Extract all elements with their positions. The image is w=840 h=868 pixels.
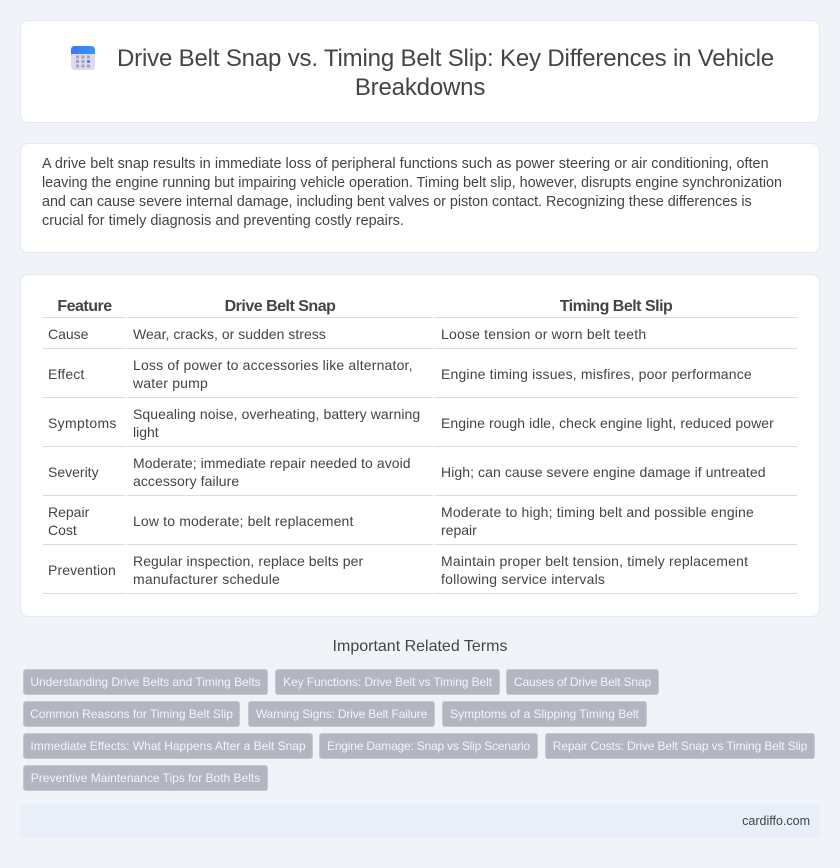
- row: effect: Effect: [48, 366, 84, 382]
- tag: [23, 669, 268, 695]
- table header: Timing Belt Slip: [560, 298, 672, 315]
- tag: [23, 765, 268, 791]
- icon: calendar: [71, 46, 95, 70]
- row: prevention: Maintain proper belt tension, timely replacement: [441, 553, 748, 569]
- row: effect: water pump: [133, 375, 208, 391]
- tag: Understanding Drive Belts and Timing Belts: [30, 675, 261, 689]
- title: Drive Belt Snap vs. Timing Belt Slip: Key Differences in Vehicle: [117, 45, 774, 72]
- tag: Immediate Effects: What Happens After a Belt Snap: [30, 739, 306, 753]
- tag: [275, 669, 500, 695]
- row: repair cost: repair: [441, 522, 477, 538]
- row: symptoms: [48, 406, 774, 440]
- tag: [506, 669, 659, 695]
- tag: Symptoms of a Slipping Timing Belt: [450, 707, 639, 721]
- row: symptoms: light: [133, 424, 159, 440]
- summary text: [42, 156, 782, 229]
- table header: Feature: [57, 298, 112, 315]
- table header: [57, 298, 672, 315]
- row: prevention: following service intervals: [441, 571, 605, 587]
- tag: Preventive Maintenance Tips for Both Belts: [31, 771, 260, 785]
- row: repair cost: Low to moderate; belt replacement: [133, 513, 354, 529]
- row: symptoms: Squealing noise, overheating, battery warning: [133, 406, 420, 422]
- tag: [248, 701, 435, 727]
- footer: [20, 804, 820, 838]
- tag: Causes of Drive Belt Snap: [514, 675, 651, 689]
- row: cause: Loose tension or worn belt teeth: [441, 326, 646, 342]
- row: cause: [48, 326, 646, 342]
- tag: [23, 733, 313, 759]
- row: severity: [48, 455, 766, 489]
- panel: summary paragraph: [20, 143, 820, 253]
- tag: Common Reasons for Timing Belt Slip: [30, 707, 233, 721]
- row: repair cost: Moderate to high; timing belt and possible engine: [441, 504, 754, 520]
- panel: comparison table: [20, 274, 820, 617]
- row: prevention: [48, 553, 748, 587]
- panel: related term tags: [23, 669, 815, 791]
- row: prevention: Prevention: [48, 562, 116, 578]
- row: prevention: Regular inspection, replace belts per: [133, 553, 363, 569]
- tag: Key Functions: Drive Belt vs Timing Belt: [283, 675, 492, 689]
- row: prevention: manufacturer schedule: [133, 571, 280, 587]
- panel: title header: [20, 20, 820, 123]
- tag: Repair Costs: Drive Belt Snap vs Timing Belt Slip: [553, 739, 807, 753]
- row: symptoms: Symptoms: [48, 415, 117, 431]
- row: severity: High; can cause severe engine damage if untreated: [441, 464, 766, 480]
- row: effect: [48, 357, 752, 391]
- row: severity: Moderate; immediate repair needed to avoid: [133, 455, 411, 471]
- title: [117, 45, 774, 101]
- heading: related terms: Important Related Terms: [333, 638, 507, 655]
- footer text: cardiffo.com: [742, 814, 810, 828]
- row: effect: Loss of power to accessories like alternator,: [133, 357, 413, 373]
- row: severity: Severity: [48, 464, 99, 480]
- title: Breakdowns: [355, 74, 485, 101]
- row: repair cost: Repair: [48, 504, 89, 520]
- row: effect: Engine timing issues, misfires, poor performance: [441, 366, 752, 382]
- tag: [23, 701, 240, 727]
- row: severity: accessory failure: [133, 473, 239, 489]
- tag: [545, 733, 815, 759]
- row: repair cost: [48, 504, 754, 538]
- summary text: leaving the engine running but impairing vehicle operation. Timing belt slip, however, disrupts engine synchronization: [42, 175, 782, 191]
- tag: [319, 733, 538, 759]
- summary text: crucial for timely diagnosis and preventing costly repairs.: [42, 213, 404, 229]
- summary text: A drive belt snap results in immediate loss of peripheral functions such as power steering or air conditioning, often: [42, 156, 769, 172]
- tag: [442, 701, 647, 727]
- row: cause: Cause: [48, 326, 88, 342]
- table header: Drive Belt Snap: [225, 298, 335, 315]
- row: cause: Wear, cracks, or sudden stress: [133, 326, 326, 342]
- row: repair cost: Cost: [48, 522, 77, 538]
- tag: Engine Damage: Snap vs Slip Scenario: [327, 739, 530, 753]
- row: symptoms: Engine rough idle, check engine light, reduced power: [441, 415, 774, 431]
- tag: Warning Signs: Drive Belt Failure: [256, 707, 427, 721]
- summary text: and can cause severe internal damage, including bent valves or piston contact. Recognizing these differences is: [42, 194, 752, 210]
